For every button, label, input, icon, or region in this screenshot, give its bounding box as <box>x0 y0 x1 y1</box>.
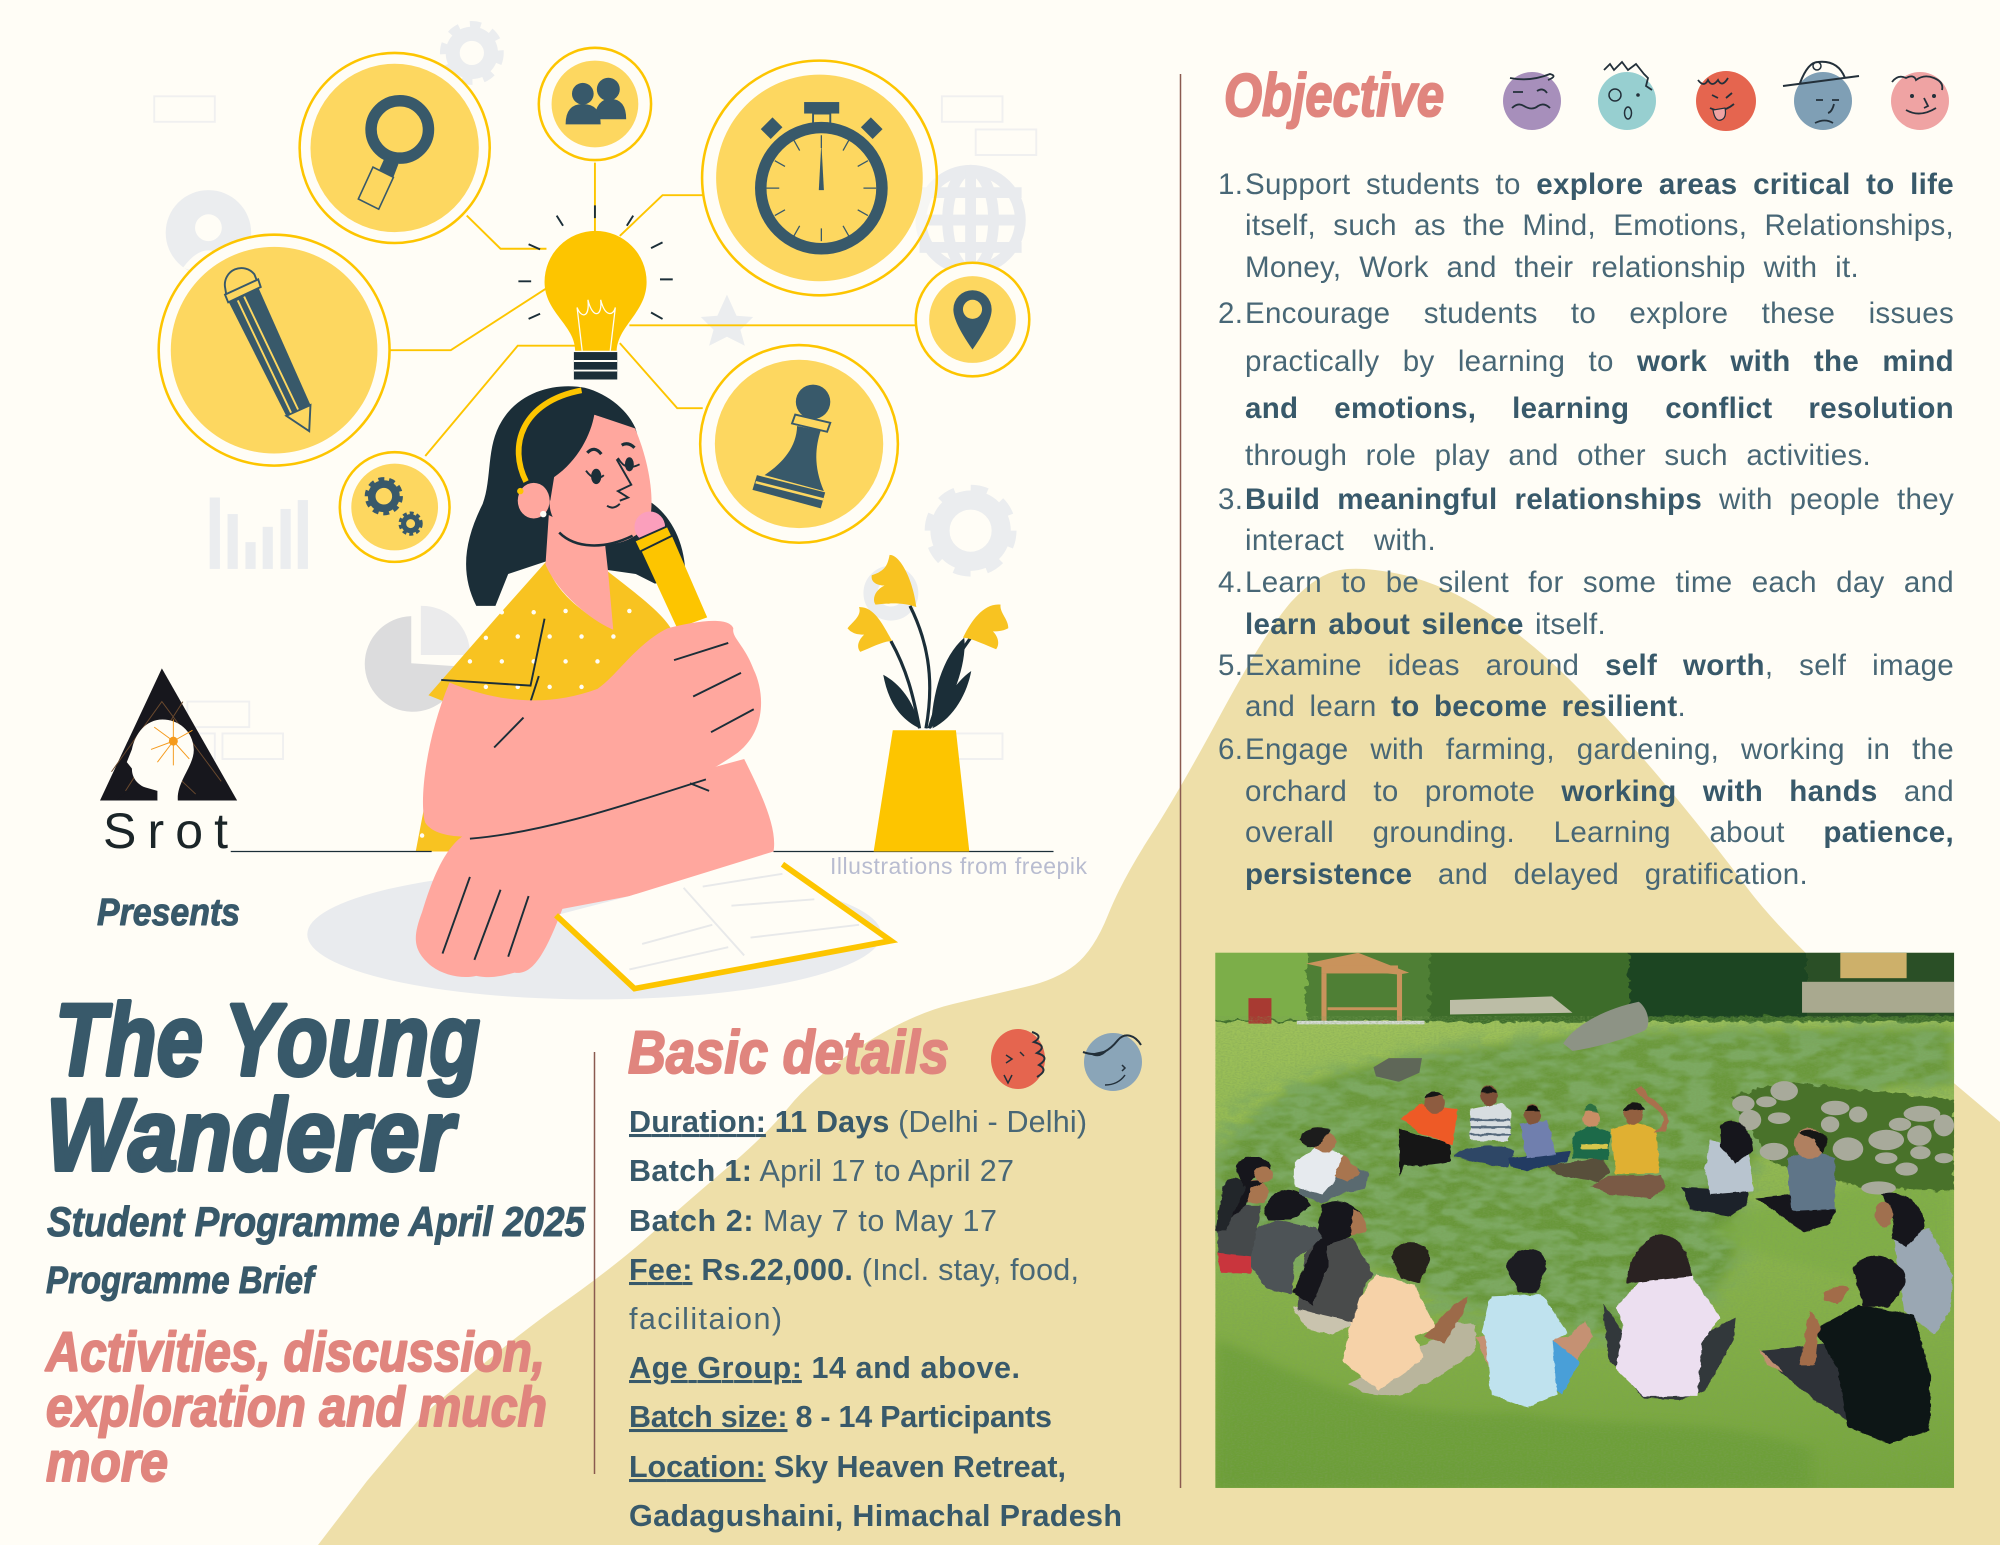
shirt <box>416 561 671 851</box>
stone wall <box>1731 1082 1954 1191</box>
item 4: learn about silence itself. <box>1245 608 1606 641</box>
icon: people <box>539 48 651 160</box>
icon: pencil <box>159 235 390 466</box>
seated people <box>1215 1085 1953 1444</box>
title: Wanderer <box>46 1078 459 1192</box>
item 6: Engage with farming, gardening, working in the <box>1245 733 1954 766</box>
arms <box>416 759 774 977</box>
icon: red face with curls <box>991 1029 1045 1089</box>
icon: blue face with fringe <box>1083 1033 1142 1091</box>
item 6 <box>1218 733 1954 891</box>
basic details list: Age Group: 14 and above. <box>629 1351 1020 1385</box>
table shadow <box>307 869 881 999</box>
lit and shaded grass <box>1210 1016 1960 1488</box>
hair back <box>466 386 686 606</box>
item 2 <box>1218 297 1954 472</box>
item 6: orchard to promote working with hands and <box>1245 775 1954 808</box>
table line <box>231 850 1054 852</box>
icon: magnifier <box>300 53 490 243</box>
icon: red face tongue <box>1696 71 1756 131</box>
tagline: Activities, discussion, <box>44 1320 545 1383</box>
rocks <box>1373 1002 1648 1082</box>
basic details list: Duration: 11 Days (Delhi - Delhi) <box>629 1105 1087 1139</box>
basic details list: facilitaion) <box>629 1302 782 1336</box>
item 6: persistence and delayed gratification. <box>1245 858 1808 891</box>
objective list <box>1218 168 1954 891</box>
item 5: Examine ideas around self worth, self image <box>1245 649 1954 682</box>
faded background icons <box>154 25 1036 759</box>
icon: gears <box>340 452 450 562</box>
basic details list: Batch 1: April 17 to April 27 <box>629 1154 1014 1188</box>
stones <box>1732 1081 1954 1195</box>
item 4: 4. <box>1218 566 1243 599</box>
basic details list: Batch 2: May 7 to May 17 <box>629 1204 997 1238</box>
open book <box>556 851 891 990</box>
logo wordmark: Srot <box>103 803 228 859</box>
basic details list <box>629 1105 1122 1533</box>
icon: stopwatch <box>702 61 937 295</box>
item 5: and learn to become resilient. <box>1245 690 1686 723</box>
item 1: Money, Work and their relationship with it. <box>1245 251 1859 284</box>
sand background shape <box>318 569 2000 1545</box>
item 6: 6. <box>1218 733 1243 766</box>
icon: location pin <box>916 263 1029 376</box>
item 6: overall grounding. Learning about patience, <box>1245 816 1954 849</box>
pencil in hand <box>639 531 707 628</box>
title: The Young <box>55 983 480 1097</box>
item 3: interact with. <box>1245 524 1436 557</box>
connector lines <box>390 163 916 456</box>
photo: group sitting in a circle on grass <box>1205 947 1965 1488</box>
item 3 <box>1218 483 1954 557</box>
title <box>46 983 480 1192</box>
item 1 <box>1218 168 1954 284</box>
heading: objective: Objective <box>1224 62 1444 129</box>
tagline <box>44 1320 547 1493</box>
icon: pink face <box>1891 72 1949 130</box>
icon: chess pawn <box>700 345 898 543</box>
item 2: and emotions, learning conflict resolution <box>1245 392 1954 425</box>
basic details list: Fee: Rs.22,000. (Incl. stay, food, <box>629 1253 1079 1287</box>
subtitle: Student Programme April 2025 <box>47 1198 586 1245</box>
item 1: 1. <box>1218 168 1243 201</box>
item 1: itself, such as the Mind, Emotions, Relationships, <box>1245 209 1954 242</box>
gazebo <box>1248 953 1424 1024</box>
item 1: Support students to explore areas critical to life <box>1245 168 1954 201</box>
basic details list: Location: Sky Heaven Retreat, <box>629 1450 1066 1484</box>
divider left <box>594 1052 596 1474</box>
programme brief: Programme Brief <box>46 1260 317 1302</box>
neck and face <box>546 517 612 628</box>
vase with flowers <box>848 555 1008 851</box>
logo triangle <box>100 668 237 800</box>
icon: blue face with hat <box>1783 62 1859 130</box>
illustration: girl thinking with idea bulb <box>154 25 1054 999</box>
item 5: 5. <box>1218 649 1243 682</box>
item 4 <box>1218 566 1954 641</box>
item 3: 3. <box>1218 483 1243 516</box>
heading: basic details: Basic details <box>628 1019 949 1086</box>
item 2: practically by learning to work with the mind <box>1245 345 1954 378</box>
item 2: Encourage students to explore these issues <box>1245 297 1954 330</box>
credit: Illustrations from freepik <box>830 853 1088 879</box>
background foliage <box>1205 947 1965 1022</box>
divider right <box>1180 74 1182 1488</box>
girl figure <box>231 386 1054 990</box>
item 4: Learn to be silent for some time each day and <box>1245 566 1954 599</box>
tagline: exploration and much <box>46 1375 547 1438</box>
item 3: Build meaningful relationships with people they <box>1245 483 1954 516</box>
item 5 <box>1218 649 1954 723</box>
basic details list: Gadagushaini, Himachal Pradesh <box>629 1499 1122 1533</box>
icon: purple face <box>1503 72 1561 130</box>
wall and house behind hedge <box>1450 953 1954 1015</box>
icon: light bulb <box>518 205 673 379</box>
item 2: 2. <box>1218 297 1243 330</box>
tagline: more <box>46 1430 168 1493</box>
basic details list: Batch size: 8 - 14 Participants <box>629 1400 1052 1434</box>
item 2: through role play and other such activities. <box>1245 439 1871 472</box>
presents: Presents <box>97 892 240 934</box>
icon: teal face <box>1598 62 1656 130</box>
